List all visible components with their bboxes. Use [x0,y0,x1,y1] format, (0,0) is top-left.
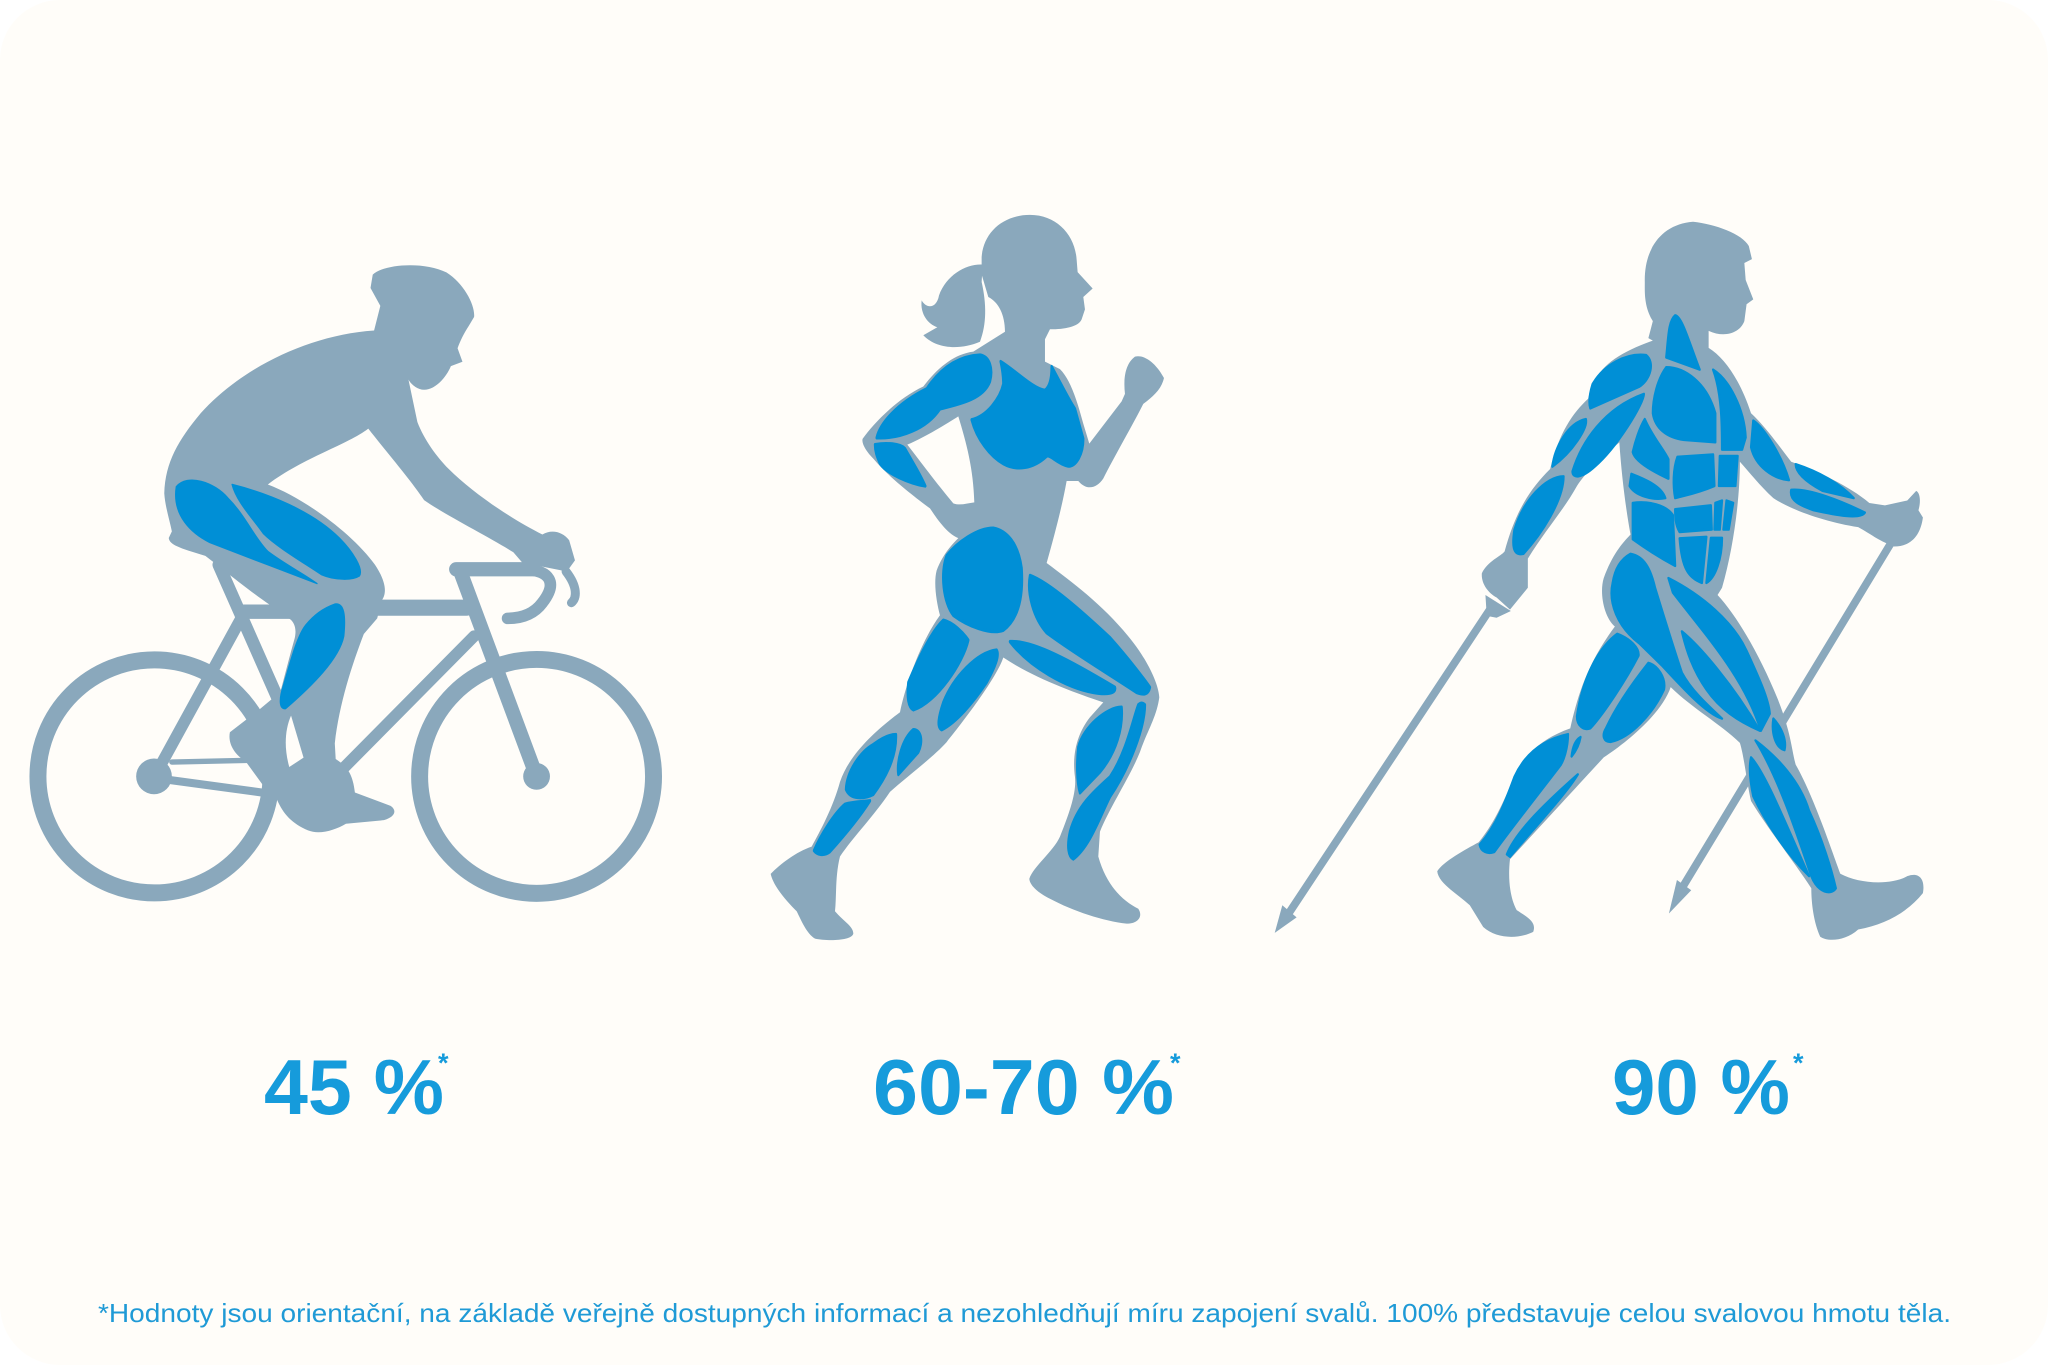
runner silhouette [771,215,1164,940]
icon: rear wheel [38,660,271,893]
figure: nordic walker [1275,222,1923,940]
muscle: middle abs right [1723,501,1733,530]
right pole [1682,544,1890,888]
muscle: chest [972,362,1083,468]
muscle: forearm [875,444,925,486]
muscle: rear knee [1572,737,1581,756]
muscle: gluteus and hamstring [176,480,317,584]
muscle: rear thigh [908,620,968,710]
wedge gap behind calf [286,716,304,767]
bicycle frame [162,565,575,793]
muscle: far chest [1713,370,1746,450]
muscle: oblique [1633,502,1675,566]
muscle: front shin [1068,703,1145,859]
muscle: middle abs centre [1714,501,1722,530]
muscle: front thigh [1029,575,1150,694]
muscle: upper abs right [1719,456,1738,486]
muscle: upper abs left [1674,454,1714,498]
muscle: quadriceps [232,484,360,579]
muscle: rear thigh back [1604,663,1664,742]
left pole handle [1485,595,1511,618]
muscle: rear knee [898,730,921,774]
muscle: gluteus [1612,554,1722,719]
muscle: rear shin [1507,774,1578,857]
muscles of the runner [814,355,1150,859]
muscle: right forearm bottom [1791,490,1865,516]
muscle: quadriceps [1668,578,1770,731]
walker silhouette [1437,222,1923,940]
figure: runner [771,215,1164,940]
muscle: lower ribs [1630,474,1665,499]
statistic: running 60-70 % [873,1043,1181,1131]
statistic: cycling 45 % [264,1043,449,1131]
muscle: front shin [1750,757,1809,876]
muscle: rear calf [846,735,896,798]
ponytail [921,265,985,347]
muscle: triceps [1552,419,1586,467]
muscle: middle abs left [1675,505,1712,532]
footnote mark: * [1170,1048,1181,1078]
muscle: lower abs left [1680,537,1706,583]
muscle: right forearm top [1796,464,1854,498]
muscle: deltoid [1589,355,1651,408]
footnote mark: * [438,1048,449,1078]
muscle: rear lower leg [814,801,870,854]
left pole tip [1275,905,1297,933]
muscle: hamstring [1010,642,1115,694]
muscle: lower abs right [1706,538,1722,583]
statistic: nordic walking 90 % [1612,1043,1804,1131]
muscle: rear thigh [1577,634,1639,729]
figure: cyclist [38,265,654,893]
muscle: right upper arm [1751,421,1789,480]
footnote: *Hodnoty jsou orientační, na základě veřejně dostupných informací a nezohledňují míru zapojení svalů. 100% představuje celou svalovou hmotu těla. [98,1298,1951,1328]
muscle: shoulder and upper arm [877,355,991,438]
icon: front hub [523,763,550,790]
icon: front wheel [420,659,654,893]
icon: rear hub [136,759,172,794]
muscle: chest [1653,367,1715,442]
rider silhouette [164,265,575,832]
muscle: front calf [1756,740,1836,892]
walking poles [1275,544,1890,933]
muscle: upper ribs [1633,419,1668,479]
muscles of the walker [1480,315,1865,892]
muscle: rear calf [1480,734,1568,853]
left pole [1288,605,1493,915]
muscle: rear thigh inner [939,650,998,730]
muscle: calf [280,604,345,709]
right pole tip [1669,880,1691,913]
value: 60-70 % [873,1043,1174,1131]
muscle: biceps [1572,394,1644,476]
value: 90 % [1612,1043,1790,1131]
muscle: inner thigh [1682,631,1760,731]
muscle: gluteus [943,528,1022,632]
bicycle [38,565,654,893]
muscle: left forearm [1513,476,1564,554]
muscle: knee [1773,719,1785,750]
value: 45 % [264,1043,444,1131]
muscle: front calf [1077,707,1122,793]
footnote mark: * [1793,1048,1804,1078]
muscle: neck [1666,315,1700,370]
